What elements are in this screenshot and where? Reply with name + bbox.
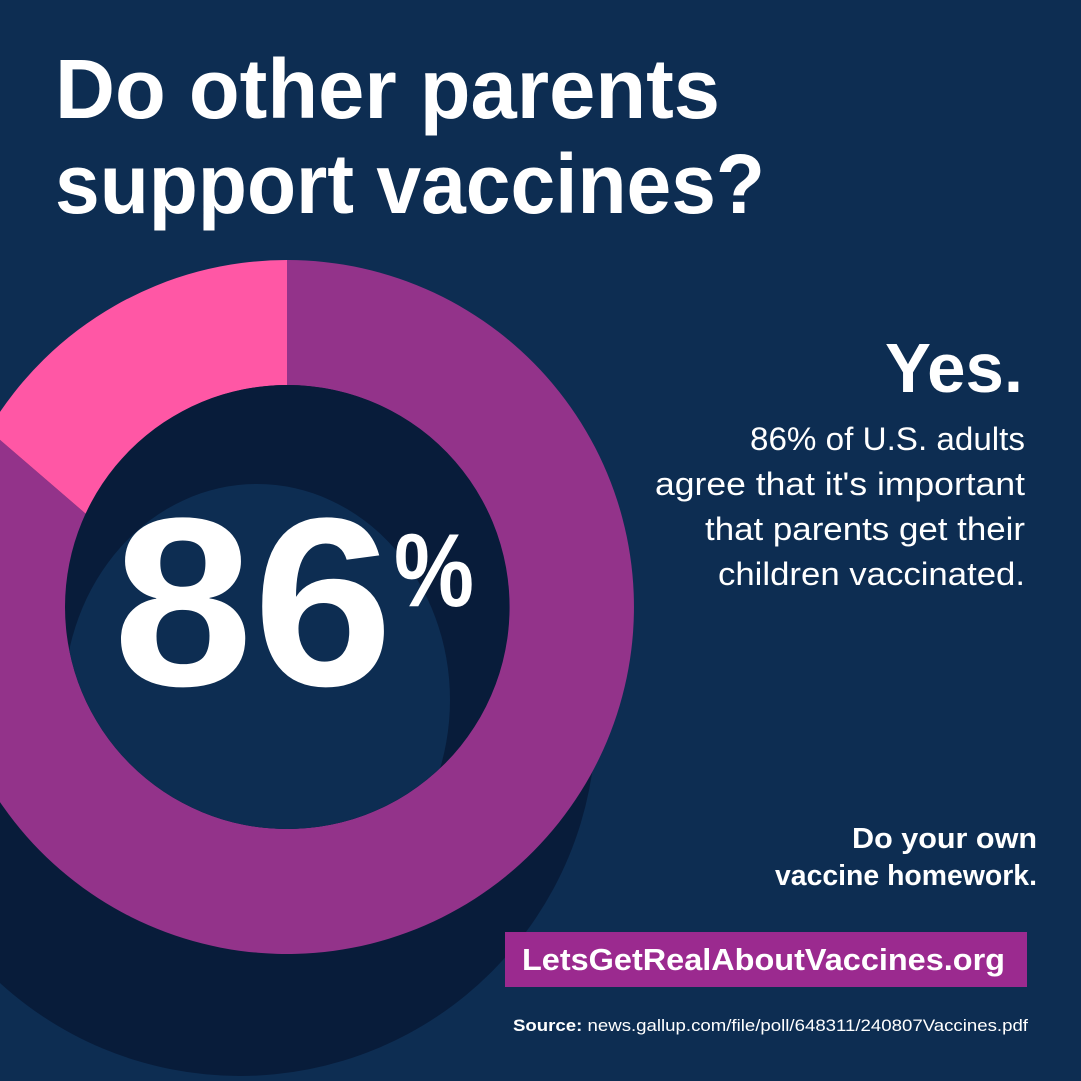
title: support vaccines? <box>55 137 765 231</box>
big stat 86%: % <box>394 513 474 629</box>
big stat 86%: 86 <box>113 468 393 736</box>
explanation text: that parents get their <box>705 511 1025 547</box>
explanation text: agree that it's important <box>655 466 1025 502</box>
title: Do other parents <box>55 42 720 136</box>
inner hole shading <box>65 385 428 829</box>
explanation text: children vaccinated. <box>718 556 1025 592</box>
website button <box>505 932 1027 987</box>
explanation text <box>655 421 1025 592</box>
donut chart <box>0 260 634 1076</box>
answer heading: Yes. <box>885 329 1023 407</box>
call to action <box>775 823 1037 892</box>
call to action: Do your own <box>852 823 1037 855</box>
source: Source: news.gallup.com/file/poll/648311/240807Vaccines.pdf <box>513 1016 1028 1035</box>
ring: pink 14% <box>0 260 287 514</box>
call to action: vaccine homework. <box>775 860 1037 892</box>
shadow ring <box>0 364 596 1076</box>
website button: LetsGetRealAboutVaccines.org <box>522 942 1005 977</box>
explanation text: 86% of U.S. adults <box>750 421 1025 457</box>
title <box>55 42 765 231</box>
ring: purple 86% <box>0 260 634 954</box>
